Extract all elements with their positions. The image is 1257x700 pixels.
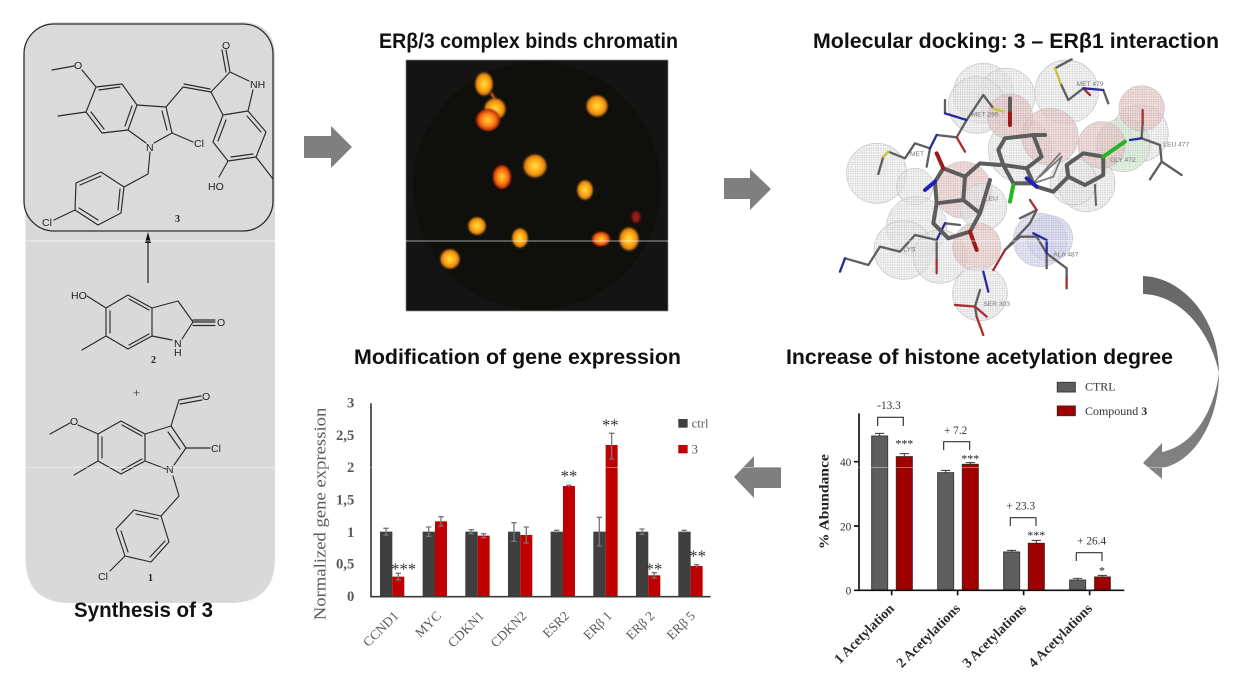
x axis labels: ESR2	[539, 608, 572, 641]
legend: 3	[692, 442, 698, 456]
heading: gene expression: Modification of gene expression	[354, 345, 681, 369]
ligand compound 3	[925, 98, 1125, 250]
x axis labels: 3 Acetylations	[960, 601, 1030, 671]
x axis labels: ERβ 5	[664, 608, 698, 643]
structure: compound 3: O	[74, 60, 82, 72]
y axis tick labels: 2	[347, 460, 354, 476]
bracket values: + 26.4	[1077, 536, 1106, 548]
x axis labels: 4 Acetylations	[1026, 601, 1096, 671]
structure: compound 2: H	[174, 347, 182, 359]
significance stars: ***	[895, 436, 913, 450]
axes	[370, 403, 711, 597]
x axis labels: CDKN2	[487, 608, 529, 650]
y axis tick labels: 0,5	[336, 556, 354, 572]
y axis tick labels	[336, 396, 354, 605]
structure: compound 2: 2	[151, 355, 156, 366]
y axis tick labels: 2,5	[336, 428, 354, 444]
arrow: histone to gene expression	[734, 456, 781, 498]
bars: CTRL	[872, 436, 1086, 590]
structure: compound 2: HO	[71, 290, 87, 302]
structure: compound 3: 3	[175, 214, 180, 225]
y axis tick labels: 1	[347, 525, 354, 541]
significance stars: **	[689, 546, 706, 565]
x axis labels: 2 Acetylations	[894, 601, 964, 671]
residue labels: LEU	[985, 196, 998, 203]
chart: normalized gene expression	[310, 396, 711, 650]
structure: compound 1: N	[166, 464, 174, 476]
heading: molecular docking: Molecular docking: 3 – ERβ1 interaction	[813, 29, 1219, 53]
x axis labels	[360, 608, 698, 650]
significance stars: ***	[1027, 528, 1045, 542]
significance stars: **	[602, 415, 619, 434]
residue labels: MET 295	[972, 112, 999, 119]
y axis tick labels: 3	[347, 396, 354, 412]
y axis tick labels: 40	[840, 457, 852, 469]
bracket values: + 23.3	[1006, 500, 1036, 512]
residue labels: LEU 477	[1163, 142, 1190, 149]
significance stars: *	[1099, 564, 1105, 578]
significance stars	[895, 436, 1105, 578]
x axis labels: ERβ 2	[623, 608, 657, 643]
structure: compound 1: O	[202, 391, 210, 403]
legend: CTRL	[1085, 380, 1116, 394]
bars: ctrl	[380, 532, 691, 597]
panel: synthesis of 3	[24, 22, 275, 603]
heading: synthesis of 3: Synthesis of 3	[74, 598, 213, 622]
structure: compound 3	[42, 40, 273, 229]
legend: Compound 3	[1085, 404, 1147, 418]
residue labels: ALA 487	[1053, 252, 1079, 259]
bracket values: + 7.2	[944, 425, 968, 437]
x axis labels: CDKN1	[445, 608, 487, 650]
x axis labels: ERβ 1	[580, 608, 615, 643]
error bars	[383, 433, 699, 580]
residue sticks	[840, 59, 1182, 335]
residue labels: GLY 472	[1110, 157, 1136, 164]
structure: compound 1: Cl	[98, 571, 108, 583]
legend	[1057, 380, 1147, 418]
structure: compound 2: N	[174, 338, 182, 350]
structure: compound 1: 1	[148, 573, 153, 584]
brackets	[878, 417, 1102, 561]
panel background	[26, 22, 275, 603]
arrow: reaction direction	[145, 232, 151, 283]
y axis tick labels: 0	[846, 586, 852, 598]
residue labels: MET 479	[1077, 81, 1104, 88]
molecular docking model	[840, 59, 1190, 335]
heading: chromatin binding: ERβ/3 complex binds chromatin	[379, 29, 678, 53]
structure: compound 3: NH	[250, 79, 265, 91]
significance stars: ***	[391, 560, 416, 579]
bracket values: -13.3	[877, 400, 901, 412]
legend: ctrl	[692, 416, 709, 430]
structure: compound 3: O	[222, 40, 230, 52]
residue labels: SER 303	[983, 301, 1010, 308]
residue labels	[903, 81, 1190, 308]
residue labels: MET	[910, 151, 924, 158]
heading: histone acetylation: Increase of histone acetylation degree	[786, 345, 1173, 369]
significance stars: **	[646, 560, 662, 579]
y axis title: Normalized gene expression	[310, 407, 329, 620]
y axis title: % Abundance	[818, 454, 833, 549]
fluorescence microscopy image	[406, 60, 668, 311]
structure: compound 3: Cl	[42, 217, 52, 229]
y axis tick labels	[840, 457, 852, 598]
structure: compound 3: N	[146, 142, 154, 154]
residue labels: LYS	[903, 247, 916, 254]
structure: compound 1: O	[70, 416, 78, 428]
structure: compound 2	[71, 290, 225, 366]
axes	[854, 413, 1124, 595]
significance stars: **	[561, 466, 577, 485]
arrow: chromatin to docking	[724, 169, 771, 210]
legend	[678, 416, 709, 456]
x axis labels	[832, 601, 1096, 671]
y axis tick labels: 0	[347, 589, 354, 605]
x axis labels: CCND1	[360, 608, 401, 650]
structure: compound 3: HO	[208, 181, 224, 193]
arrow: curved docking to histone	[1143, 276, 1219, 479]
significance stars	[391, 415, 706, 579]
y axis tick labels: 20	[840, 521, 852, 533]
chart: histone acetylation abundance	[818, 380, 1147, 671]
arrow: synthesis to chromatin	[304, 126, 352, 168]
structure: compound 2: O	[217, 317, 225, 329]
x axis labels: 1 Acetylation	[832, 601, 898, 667]
bars: compound 3	[392, 445, 703, 597]
bracket values	[877, 400, 1106, 548]
structure: compound 1: Cl	[211, 443, 221, 455]
structure: compound 3: Cl	[194, 138, 204, 150]
bars: compound 3	[896, 457, 1110, 590]
y axis tick labels: 1,5	[336, 493, 354, 509]
interaction spheres	[847, 60, 1168, 321]
error bars	[875, 433, 1107, 580]
compound 3 box	[24, 24, 273, 231]
significance stars: ***	[961, 452, 979, 466]
plus sign: +	[133, 385, 140, 400]
x axis labels: MYC	[412, 608, 444, 640]
structure: compound 1	[50, 391, 221, 584]
